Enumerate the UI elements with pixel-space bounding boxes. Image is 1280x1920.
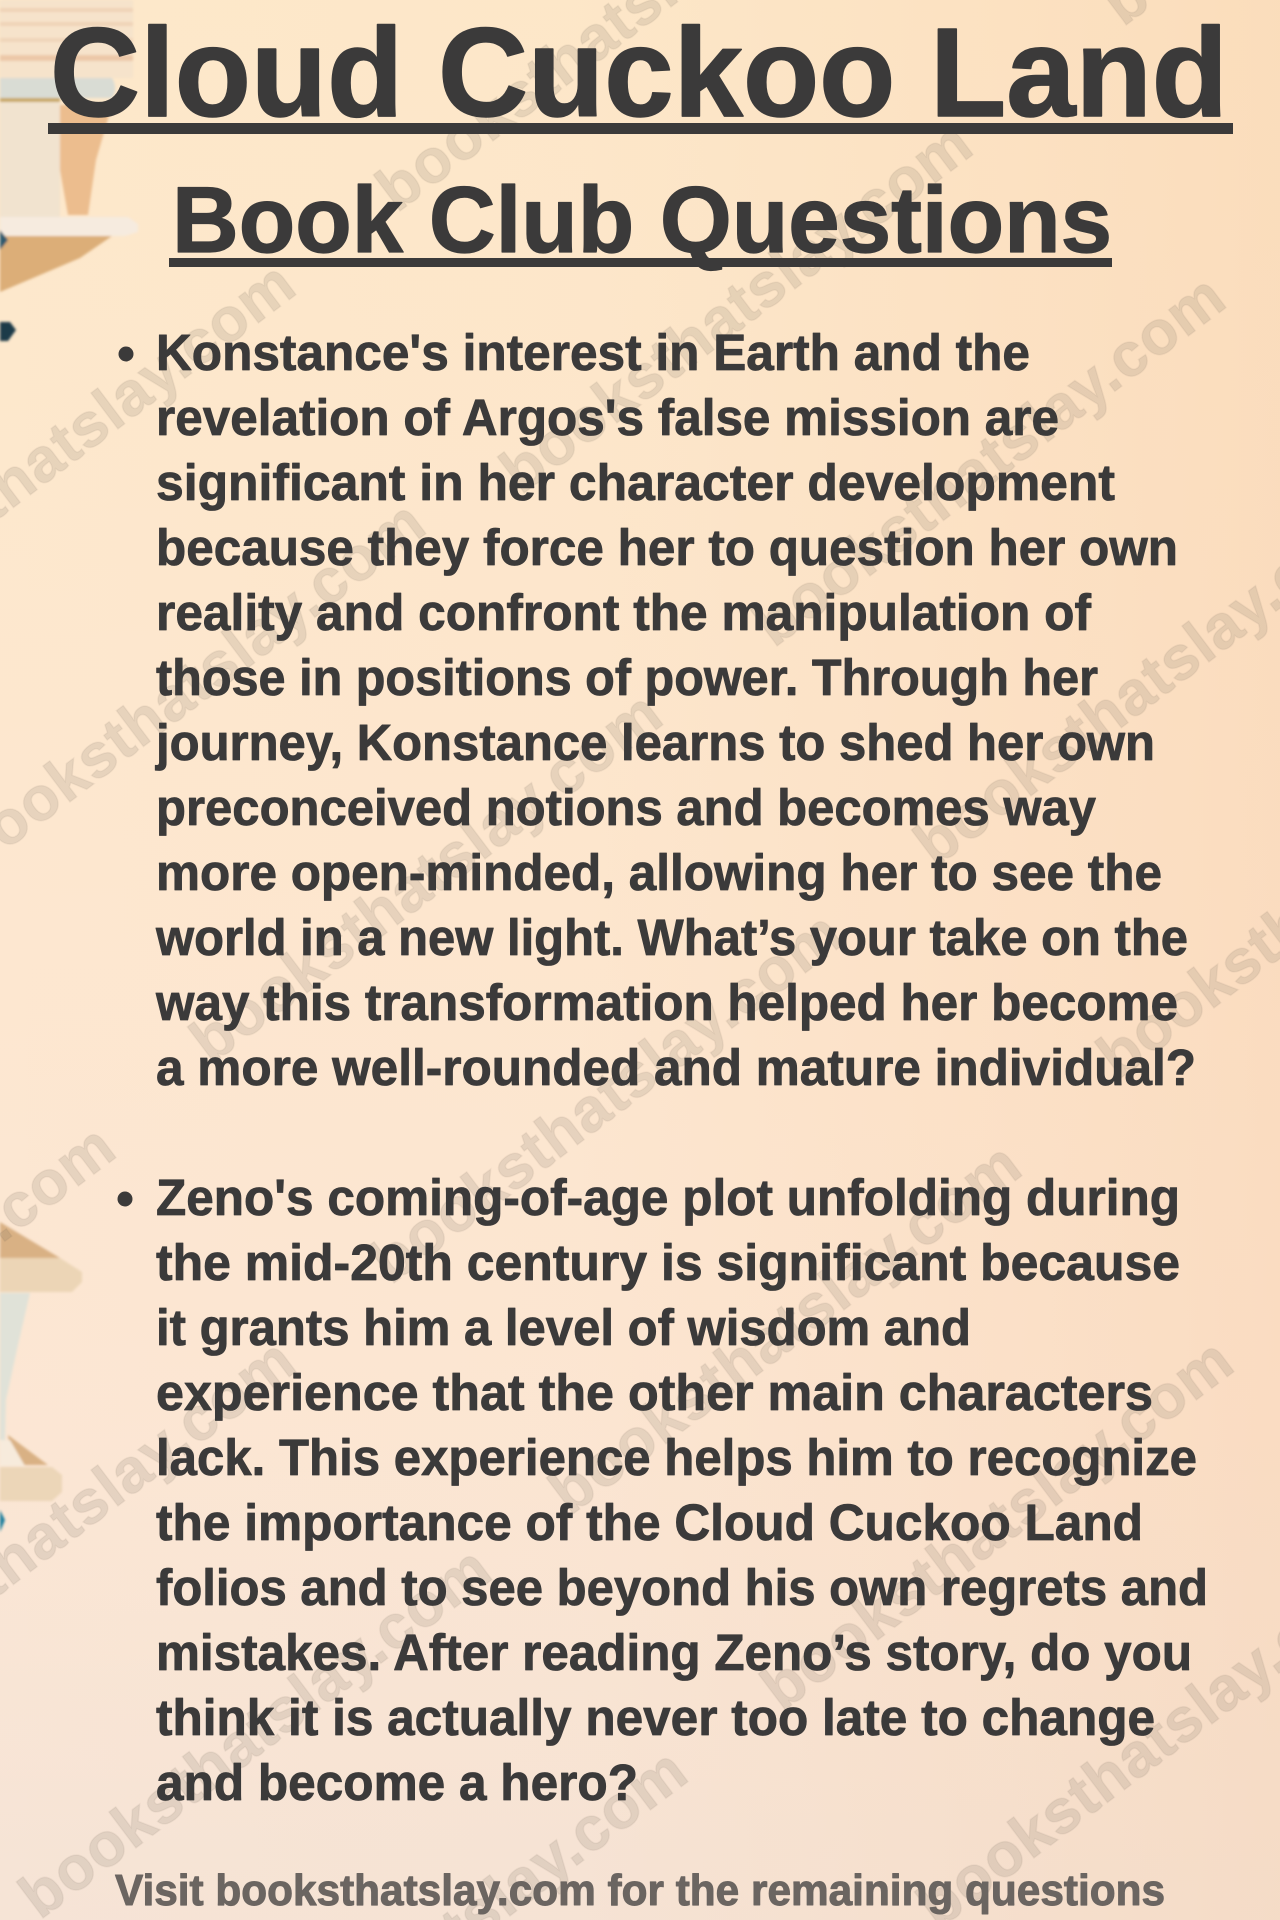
- question 2 text: the importance of the Cloud Cuckoo Land: [156, 1494, 1143, 1551]
- question 1 text: preconceived notions and becomes way: [156, 779, 1097, 836]
- question 2 text: it grants him a level of wisdom and: [156, 1299, 971, 1356]
- question 1 text: world in a new light. What’s your take on the: [155, 909, 1188, 966]
- question 1 text: Konstance's interest in Earth and the: [156, 324, 1030, 381]
- watermarks: booksthatslay.com: [749, 1325, 1245, 1724]
- question 1 text: reality and confront the manipulation of: [156, 584, 1092, 641]
- question 2 text: think it is actually never too late to change: [156, 1689, 1155, 1746]
- question 1 text: because they force her to question her own: [156, 519, 1178, 576]
- question 2 text: Zeno's coming-of-age plot unfolding during: [156, 1169, 1180, 1226]
- question 1: Konstance: [118, 324, 1196, 1096]
- watermarks: booksthatslay.com: [488, 108, 984, 507]
- watermarks: booksthatslay.com: [741, 261, 1237, 660]
- question 2 text: the mid-20th century is significant because: [156, 1234, 1180, 1291]
- bullet: [118, 346, 134, 362]
- subtitle: Book Club Questions: [172, 167, 1112, 272]
- question 2 text: and become a hero?: [156, 1754, 638, 1811]
- question 1 text: revelation of Argos's false mission are: [156, 389, 1059, 446]
- question 1 text: a more well-rounded and mature individual?: [156, 1039, 1196, 1096]
- question 2 text: lack. This experience helps him to recognize: [156, 1429, 1197, 1486]
- illustration: stacked books lower left: [0, 1222, 82, 1532]
- question 1 text: [155, 324, 1196, 1096]
- footer call to action: Visit booksthatslay.com for the remaining questions: [115, 1866, 1165, 1915]
- question 1 text: significant in her character development: [156, 454, 1115, 511]
- question 1 text: those in positions of power. Through her: [156, 649, 1098, 706]
- question 1 text: journey, Konstance learns to shed her own: [155, 714, 1155, 771]
- question 1 text: way this transformation helped her become: [155, 974, 1178, 1031]
- question 2 text: experience that the other main characters: [156, 1364, 1153, 1421]
- question 2 text: mistakes. After reading Zeno’s story, do you: [156, 1624, 1192, 1681]
- title: Cloud Cuckoo Land: [50, 2, 1228, 143]
- watermarks: booksthatslay.com: [537, 1129, 1033, 1528]
- illustration: stacked books top left: [0, 0, 138, 341]
- watermarks: booksthatslay.com: [358, 898, 854, 1297]
- question 2 text: folios and to see beyond his own regrets and: [156, 1559, 1208, 1616]
- watermarks: booksthatslay.com: [7, 1533, 503, 1920]
- bullet: [118, 1192, 132, 1206]
- watermarks: booksthatslay.com: [178, 678, 674, 1077]
- question 1 text: more open-minded, allowing her to see the: [156, 844, 1162, 901]
- question 2: Zeno: [118, 1169, 1208, 1811]
- question 2 text: [156, 1169, 1208, 1811]
